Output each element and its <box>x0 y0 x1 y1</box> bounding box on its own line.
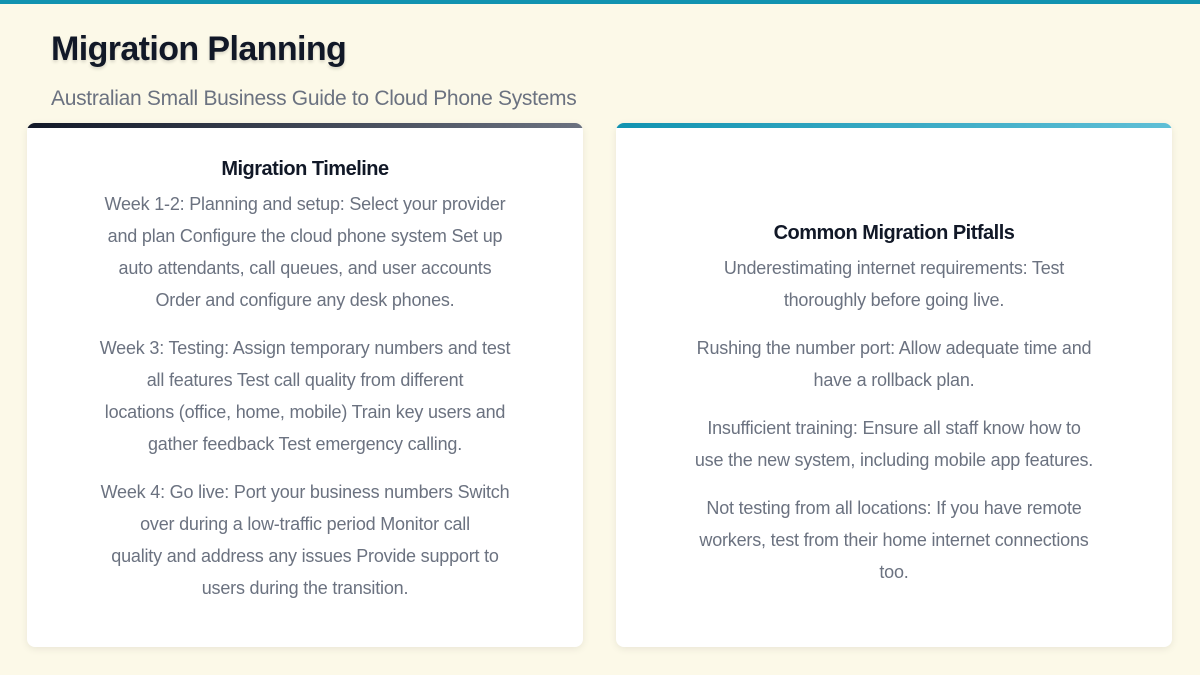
text: week 3: all features Test call quality from different <box>147 370 463 390</box>
heading: migration timeline: Migration Timeline <box>221 158 389 180</box>
text: number port <box>697 338 1091 390</box>
panel: migration timeline <box>27 123 583 647</box>
text: week 4: over during a low-traffic period Monitor call <box>140 514 470 534</box>
text: training: Insufficient training: Ensure all staff know how to <box>707 418 1081 438</box>
text: number port: Rushing the number port: Allow adequate time and <box>697 338 1091 358</box>
text: internet requirements: Underestimating internet requirements: Test <box>724 258 1064 278</box>
text: week 4: Week 4: Go live: Port your business numbers Switch <box>101 482 509 502</box>
text: week 3: Week 3: Testing: Assign temporary numbers and test <box>100 338 510 358</box>
text: week 1-2: auto attendants, call queues, and user accounts <box>119 258 491 278</box>
subtitle: Australian Small Business Guide to Cloud Phone Systems <box>51 87 576 110</box>
text: locations: too. <box>879 562 909 582</box>
text: week 1-2: Week 1-2: Planning and setup: Select your provider <box>105 194 505 214</box>
text: number port: have a rollback plan. <box>814 370 974 390</box>
text: week 1-2: Order and configure any desk phones. <box>155 290 454 310</box>
text: week 3 <box>100 338 510 454</box>
text: locations: Not testing from all locations: If you have remote <box>706 498 1082 518</box>
text: week 4 <box>100 482 509 598</box>
text: internet requirements <box>724 258 1064 310</box>
text: week 4: users during the transition. <box>202 578 408 598</box>
text: internet requirements: thoroughly before going live. <box>784 290 1004 310</box>
text: locations <box>699 498 1089 582</box>
top accent bar <box>0 0 1200 4</box>
title: Migration Planning <box>51 30 346 68</box>
heading: pitfalls: Common Migration Pitfalls <box>774 222 1014 244</box>
text: week 3: gather feedback Test emergency calling. <box>148 434 462 454</box>
panel: common pitfalls <box>616 123 1172 647</box>
text: week 3: locations (office, home, mobile) Train key users and <box>105 402 505 422</box>
text: locations: workers, test from their home internet connections <box>699 530 1089 550</box>
text: week 4: quality and address any issues Provide support to <box>111 546 499 566</box>
text: training: use the new system, including mobile app features. <box>695 450 1093 470</box>
text: week 1-2 <box>104 194 506 310</box>
text: training <box>695 418 1093 470</box>
text: week 1-2: and plan Configure the cloud phone system Set up <box>108 226 502 246</box>
